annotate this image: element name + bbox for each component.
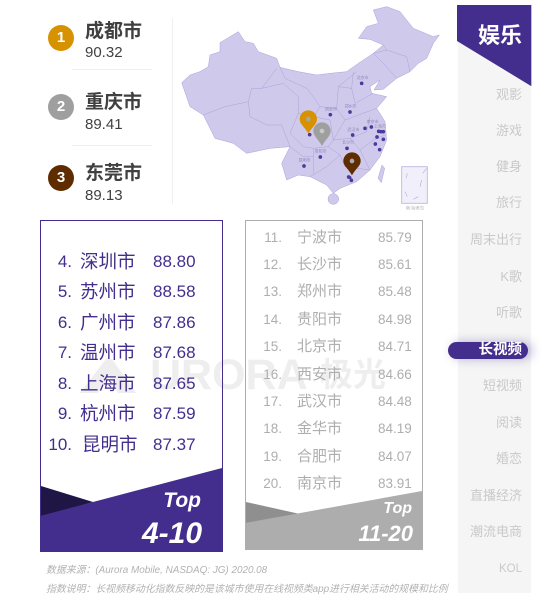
watermark chinese text: 极光 bbox=[320, 356, 386, 393]
city dots bbox=[302, 82, 385, 182]
rank 19 row bbox=[263, 448, 412, 465]
rank 20 row: 83.91 bbox=[378, 476, 412, 491]
pin: Dongguan bbox=[343, 152, 361, 175]
city labels: 南京市 bbox=[367, 118, 379, 124]
active item: 长视频: 长视频 bbox=[478, 342, 522, 358]
rank 19 row: 19. bbox=[263, 449, 282, 464]
rank 8 row bbox=[58, 373, 196, 394]
rank 2 badge: 2 bbox=[57, 98, 65, 115]
rank 6 row: 6. bbox=[58, 313, 72, 332]
pin: Chongqing bbox=[313, 122, 331, 146]
rank 1 badge: 1 bbox=[57, 29, 65, 46]
rank 3 score: 89.13 bbox=[85, 187, 123, 204]
rank 2 city: 重庆市 bbox=[85, 92, 142, 113]
rank 14 row: 84.98 bbox=[378, 312, 412, 327]
rank 8 row: 上海市 bbox=[80, 373, 136, 394]
rank 12 row bbox=[263, 256, 412, 273]
rank 16 row: 16. bbox=[263, 367, 282, 382]
rank 3 city: 东莞市 bbox=[85, 163, 142, 184]
item: 短视频: 短视频 bbox=[483, 378, 522, 393]
Hainan island bbox=[328, 194, 339, 204]
rank 6 row: 87.86 bbox=[153, 313, 196, 332]
rank 9 row: 9. bbox=[58, 404, 72, 423]
rank 1 city: 成都市 bbox=[85, 21, 142, 42]
item: 周末出行: 周末出行 bbox=[470, 232, 522, 247]
rank 1 badge bbox=[48, 25, 74, 51]
rank 13 row: 13. bbox=[263, 284, 282, 299]
rank 16 row: 西安市 bbox=[297, 366, 342, 383]
city labels: 长沙市 bbox=[342, 138, 354, 144]
rank 4 row bbox=[58, 251, 196, 272]
rank 20 row: 20. bbox=[263, 476, 282, 491]
item: 潮流电商: 潮流电商 bbox=[470, 524, 522, 539]
item: 观影: 观影 bbox=[496, 87, 522, 102]
item: 游戏: 游戏 bbox=[496, 123, 522, 138]
rank 13 row bbox=[263, 283, 412, 300]
watermark latin text: URORA bbox=[150, 351, 308, 399]
item: KOL: KOL bbox=[499, 563, 522, 575]
city labels: 西安市 bbox=[325, 105, 337, 111]
rank 8 row: 8. bbox=[58, 374, 72, 393]
rank 10 row: 87.37 bbox=[153, 435, 196, 454]
Taiwan island bbox=[378, 165, 385, 183]
rank 7 row: 温州市 bbox=[80, 342, 136, 363]
rank 10 row: 10. bbox=[48, 435, 72, 454]
Top label: Top bbox=[163, 489, 201, 512]
item: 阅读: 阅读 bbox=[496, 415, 522, 430]
rank 16 row: 84.66 bbox=[378, 367, 412, 382]
rank 16 row bbox=[263, 366, 412, 383]
gray banner shape bbox=[246, 491, 422, 549]
rank 5 row bbox=[58, 281, 196, 302]
rank 15 row: 84.71 bbox=[378, 339, 412, 354]
rank 2 score: 89.41 bbox=[85, 116, 123, 133]
watermark bbox=[80, 351, 386, 399]
4-10 label: 4-10 bbox=[142, 517, 202, 550]
pin: Chongqing centre bbox=[320, 129, 324, 133]
rank 10 row bbox=[48, 434, 196, 455]
rank 4 row: 4. bbox=[58, 252, 72, 271]
rank 10 row: 昆明市 bbox=[82, 434, 138, 455]
rank 7 row bbox=[58, 342, 196, 363]
footnote: index explanation: 指数说明：长视频移动化指数反映的是该城市使用在线视频类app进行相关活动的规模和比例 bbox=[46, 584, 448, 595]
rank 15 row bbox=[263, 338, 412, 355]
map of China bbox=[182, 6, 440, 211]
rank 20 row: 南京市 bbox=[297, 475, 342, 492]
rank 4 row: 深圳市 bbox=[80, 251, 136, 272]
mainland outline bbox=[182, 7, 439, 193]
South China Sea inset bbox=[402, 167, 427, 211]
rank 18 row: 金华市 bbox=[297, 420, 342, 437]
rank 9 row: 杭州市 bbox=[80, 403, 136, 424]
rank 11 row: 宁波市 bbox=[297, 229, 342, 246]
rank 14 row: 贵阳市 bbox=[297, 311, 342, 328]
item: 健身: 健身 bbox=[496, 159, 522, 174]
sidebar bbox=[458, 5, 531, 593]
rank 18 row: 18. bbox=[263, 421, 282, 436]
rank 17 row: 17. bbox=[263, 394, 282, 409]
rank 13 row: 85.48 bbox=[378, 284, 412, 299]
rank 5 row: 苏州市 bbox=[80, 281, 136, 302]
rank 18 row: 84.19 bbox=[378, 421, 412, 436]
city labels: 昆明市 bbox=[299, 157, 311, 163]
item: 直播经济: 直播经济 bbox=[470, 488, 522, 503]
rank 11 row: 11. bbox=[264, 230, 282, 245]
rank 6 row: 广州市 bbox=[80, 312, 136, 333]
rank 7 row: 7. bbox=[58, 343, 72, 362]
panel: top 4-10 bbox=[40, 220, 223, 552]
item: K歌: K歌 bbox=[500, 269, 522, 284]
rank 11 row bbox=[264, 229, 412, 246]
city labels: 郑州市 bbox=[345, 103, 357, 109]
sidebar header bbox=[457, 5, 532, 86]
pin: Chengdu bbox=[300, 110, 317, 133]
menu list bbox=[447, 87, 537, 575]
panel: top 11-20 bbox=[245, 220, 423, 550]
rank 14 row bbox=[263, 311, 412, 328]
rank 20 row bbox=[263, 475, 412, 492]
active item: 长视频 bbox=[448, 342, 528, 359]
sidebar title: 娱乐 bbox=[478, 23, 522, 48]
rank 15 row: 15. bbox=[263, 339, 282, 354]
city labels: 北京市 bbox=[357, 74, 369, 80]
rank 19 row: 84.07 bbox=[378, 449, 412, 464]
pin: Dongguan centre bbox=[350, 159, 354, 163]
city labels: 武汉市 bbox=[347, 126, 359, 132]
purple banner shape bbox=[41, 468, 222, 551]
item: 旅行: 旅行 bbox=[496, 195, 522, 210]
footnote: source: 数据来源：(Aurora Mobile, NASDAQ: JG) 2020.08 bbox=[46, 565, 267, 576]
rank 19 row: 合肥市 bbox=[297, 448, 342, 465]
rank 3 badge: 3 bbox=[57, 169, 65, 186]
rank 17 row: 84.48 bbox=[378, 394, 412, 409]
item: 听歌: 听歌 bbox=[496, 305, 522, 320]
rank 5 row: 88.58 bbox=[153, 282, 196, 301]
rank 13 row: 郑州市 bbox=[297, 283, 342, 300]
watermark logo bbox=[80, 359, 136, 393]
rank 17 row bbox=[263, 393, 412, 410]
rank 6 row bbox=[58, 312, 196, 333]
rank 1 score: 90.32 bbox=[85, 44, 123, 61]
rank 12 row: 长沙市 bbox=[297, 256, 342, 273]
item: 婚恋: 婚恋 bbox=[496, 451, 522, 466]
rank 18 row bbox=[263, 420, 412, 437]
city labels: 上海市 bbox=[374, 122, 386, 128]
rank 12 row: 12. bbox=[263, 257, 282, 272]
rank 15 row: 北京市 bbox=[297, 338, 342, 355]
rank 7 row: 87.68 bbox=[153, 343, 196, 362]
rank 9 row bbox=[58, 403, 196, 424]
city labels: 贵阳市 bbox=[315, 148, 327, 154]
South China Sea inset: 南海诸岛 bbox=[406, 204, 425, 211]
rank 3 badge bbox=[48, 165, 74, 191]
rank 12 row: 85.61 bbox=[378, 257, 412, 272]
rank 9 row: 87.59 bbox=[153, 404, 196, 423]
rank 14 row: 14. bbox=[263, 312, 282, 327]
pin: Chengdu centre bbox=[306, 117, 311, 121]
city labels bbox=[299, 74, 386, 163]
rank 4 row: 88.80 bbox=[153, 252, 196, 271]
rank 5 row: 5. bbox=[58, 282, 72, 301]
11-20 label: 11-20 bbox=[358, 521, 413, 546]
rank 8 row: 87.65 bbox=[153, 374, 196, 393]
Top label: Top bbox=[383, 500, 412, 517]
rank 11 row: 85.79 bbox=[378, 230, 412, 245]
rank 2 badge bbox=[48, 94, 74, 120]
rank 17 row: 武汉市 bbox=[297, 393, 342, 410]
top three cities bbox=[48, 18, 173, 204]
